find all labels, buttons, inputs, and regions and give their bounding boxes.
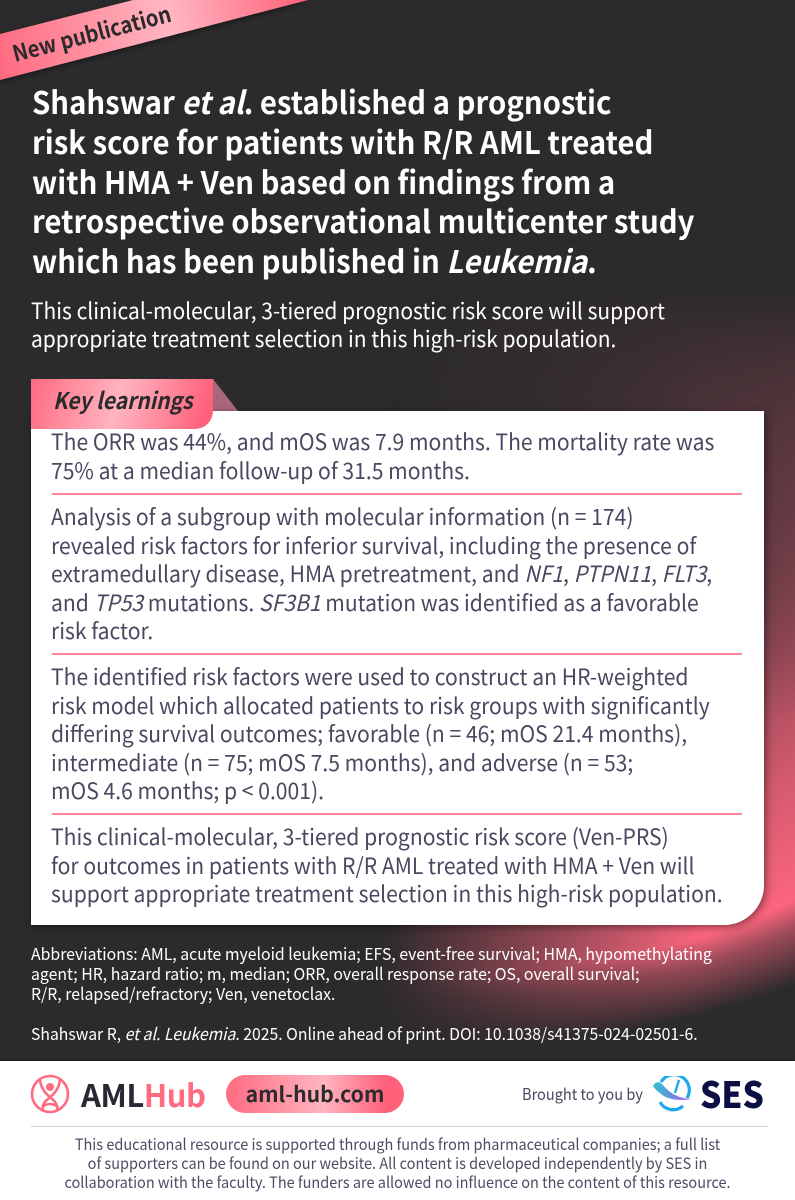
key learning 4: This clinical-molecular, 3-tiered prognostic risk score (Ven-PRS) <box>51 820 669 852</box>
key learning 4: for outcomes in patients with R/R AML treated with HMA + Ven will <box>51 849 695 881</box>
AMLHub wordmark: AMLHub <box>81 1071 205 1116</box>
key learning 1 <box>51 425 714 486</box>
key learning 4: support appropriate treatment selection in this high-risk population. <box>51 877 723 909</box>
key learning 2: and TP53 mutations. SF3B1 mutation was identified as a favorable <box>51 586 699 618</box>
tab: key learnings <box>31 379 213 429</box>
icon: SES logo <box>653 1076 692 1112</box>
brought to you by: Brought to you by <box>522 1081 643 1105</box>
key learning 3: differing survival outcomes; favorable (n = 46; mOS 21.4 months), <box>51 717 687 749</box>
icon: AMLHub logo <box>30 1074 70 1114</box>
key learning 2 <box>51 500 712 646</box>
tab label: Key learnings <box>53 382 192 416</box>
title: with HMA + Ven based on findings from a <box>32 158 615 203</box>
abbreviations <box>31 941 712 1005</box>
disclaimer <box>64 1133 731 1193</box>
title: which has been published in Leukemia. <box>32 237 597 282</box>
card <box>31 411 764 925</box>
disclaimer: of supporters can be found on our website. All content is developed independently by SES in <box>88 1152 707 1174</box>
SES wordmark: SES <box>700 1067 764 1119</box>
panel: key learnings <box>31 379 772 932</box>
key learning 2: risk factor. <box>51 614 153 646</box>
ribbon: new publication <box>0 0 308 80</box>
key learning 4 <box>51 820 723 909</box>
key learning 1: 75% at a median follow-up of 31.5 months. <box>51 454 470 486</box>
key learning 2: extramedullary disease, HMA pretreatment, and NF1, PTPN11, FLT3, <box>51 557 712 589</box>
subtitle: This clinical-molecular, 3-tiered prognostic risk score will support <box>31 294 665 326</box>
title: risk score for patients with R/R AML treated <box>32 118 653 163</box>
website pill: aml-hub.com <box>246 1078 384 1109</box>
title: Shahswar et al. established a prognostic <box>32 78 611 123</box>
title: retrospective observational multicenter study <box>32 197 694 242</box>
key learning 2: Analysis of a subgroup with molecular information (n = 174) <box>51 500 633 532</box>
subtitle <box>31 294 665 354</box>
title <box>32 78 694 282</box>
reference: Shahswar R, et al. Leukemia. 2025. Online ahead of print. DOI: 10.1038/s41375-024-02501-6. <box>31 1021 698 1045</box>
disclaimer: collaboration with the faculty. The funders are allowed no influence on the content of this resource. <box>64 1171 731 1193</box>
key learning 2: revealed risk factors for inferior survival, including the presence of <box>51 529 696 561</box>
abbreviations: R/R, relapsed/refractory; Ven, venetoclax. <box>31 981 335 1005</box>
abbreviations: Abbreviations: AML, acute myeloid leukemia; EFS, event-free survival; HMA, hypomethylating <box>31 941 712 965</box>
website pill <box>226 1075 404 1113</box>
key learning 3: mOS 4.6 months; p < 0.001). <box>51 774 324 806</box>
tab fold <box>213 379 238 411</box>
key learning 3: intermediate (n = 75; mOS 7.5 months), and adverse (n = 53; <box>51 746 633 778</box>
disclaimer: This educational resource is supported through funds from pharmaceutical companies; a full list <box>75 1133 720 1155</box>
footer divider <box>31 1126 768 1127</box>
key learning 3: risk model which allocated patients to risk groups with significantly <box>51 689 710 721</box>
key learning 3: The identified risk factors were used to construct an HR-weighted <box>51 660 689 692</box>
key learning 3 <box>51 660 710 806</box>
footer <box>0 1061 795 1200</box>
background glow <box>392 310 795 1036</box>
subtitle: appropriate treatment selection in this high-risk population. <box>31 322 616 354</box>
key learning 1: The ORR was 44%, and mOS was 7.9 months. The mortality rate was <box>51 425 714 457</box>
abbreviations: agent; HR, hazard ratio; m, median; ORR, overall response rate; OS, overall survival; <box>31 961 639 985</box>
